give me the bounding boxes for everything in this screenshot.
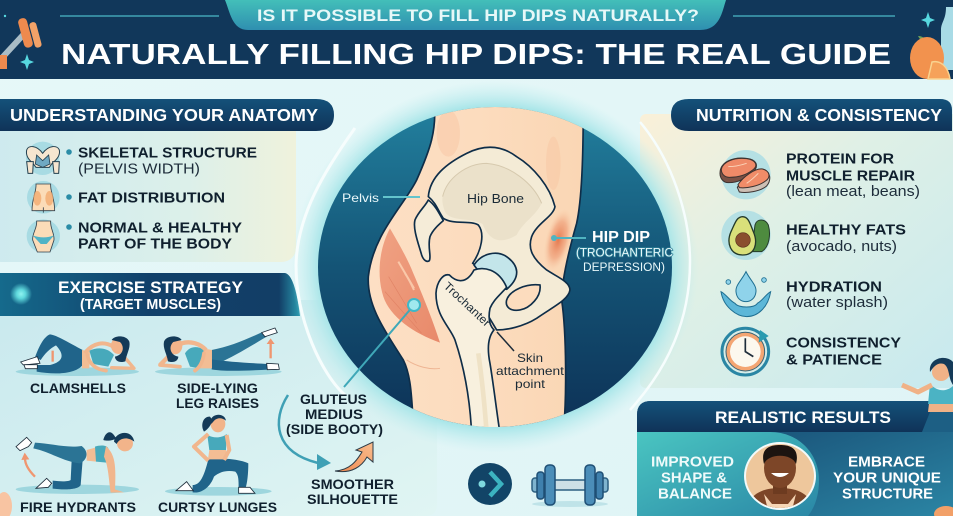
heading: exercise strategy: EXERCISE STRATEGY xyxy=(58,279,243,297)
text: improved shape and balance xyxy=(651,454,734,502)
heading: realistic results: REALISTIC RESULTS xyxy=(715,408,891,427)
text: fat distribution: FAT DISTRIBUTION xyxy=(78,190,225,206)
text: hydration: (water splash) xyxy=(786,295,888,311)
figure: fire hydrant pose xyxy=(16,432,139,494)
text: normal and healthy xyxy=(66,220,242,252)
leader: skin attachment xyxy=(497,332,514,351)
heading: understanding your anatomy: UNDERSTANDING YOUR ANATOMY xyxy=(10,105,318,125)
leader: gluteus medius xyxy=(344,299,420,387)
text: hydration xyxy=(786,278,888,311)
leader: hip dip xyxy=(551,235,586,241)
text: healthy fats: (avocado, nuts) xyxy=(786,239,897,255)
heading: nutrition and consistency xyxy=(671,99,952,131)
icon: water bottle xyxy=(941,7,953,70)
icon: fat distribution xyxy=(27,181,60,214)
icon: pelvis xyxy=(26,142,60,175)
icon: clock xyxy=(722,328,769,375)
text: consistency: & PATIENCE xyxy=(786,352,882,368)
panel: nutrition and consistency xyxy=(640,99,953,388)
label: skin attachment point: Skin xyxy=(517,351,543,365)
label: trochanter: Trochanter xyxy=(441,280,492,330)
central hip anatomy diagram xyxy=(291,81,699,453)
text: consistency xyxy=(786,334,901,368)
label: hip bone: Hip Bone xyxy=(467,191,524,206)
text: consistency: CONSISTENCY xyxy=(786,334,901,352)
main title: NATURALLY FILLING HIP DIPS: THE REAL GUIDE xyxy=(61,39,891,71)
text: improved shape and balance: SHAPE & xyxy=(661,470,727,486)
arrow: orange rising xyxy=(335,442,373,472)
label: hip dip: HIP DIP xyxy=(592,229,650,246)
label: side-lying leg raises: SIDE-LYING xyxy=(177,380,258,396)
icon: small star xyxy=(4,15,6,17)
obturator foramen xyxy=(506,285,540,310)
body silhouette and bones xyxy=(368,100,583,433)
text: protein xyxy=(786,150,920,200)
text: normal and healthy: NORMAL & HEALTHY xyxy=(78,220,242,236)
label: gluteus medius: (SIDE BOOTY) xyxy=(286,421,383,437)
label: gluteus medius: MEDIUS xyxy=(305,406,363,422)
icon: peach and orange xyxy=(910,36,950,79)
text: protein: PROTEIN FOR xyxy=(786,150,894,168)
text: embrace your unique structure: STRUCTURE xyxy=(842,486,933,502)
heading: understanding your anatomy xyxy=(0,99,334,131)
label: fire hydrants: FIRE HYDRANTS xyxy=(20,499,136,515)
icon: sparkle right xyxy=(921,12,935,28)
panel: realistic results xyxy=(637,401,953,516)
label: curtsy lunges: CURTSY LUNGES xyxy=(158,499,277,515)
figure: curtsy lunge pose xyxy=(165,415,272,496)
panel: exercise strategy xyxy=(0,273,437,516)
text: embrace your unique structure: YOUR UNIQUE xyxy=(833,470,941,486)
portrait: smiling woman xyxy=(744,442,816,510)
icon: protein steaks xyxy=(720,150,771,199)
header band xyxy=(0,0,953,79)
label: gluteus medius: GLUTEUS xyxy=(300,391,367,407)
text: skeletal structure xyxy=(66,144,257,178)
text: embrace your unique structure: EMBRACE xyxy=(848,454,925,470)
gluteus muscle xyxy=(380,228,440,343)
heading: realistic results xyxy=(637,401,953,432)
label: pelvis: Pelvis xyxy=(342,191,379,205)
icon: chevron button xyxy=(468,463,512,505)
icon: water drop xyxy=(721,272,771,317)
heading: exercise strategy xyxy=(0,273,300,316)
decorative rule left xyxy=(60,15,219,17)
label: skin attachment point xyxy=(496,351,565,391)
arrow: teal curve xyxy=(279,395,331,470)
label: skin attachment point: point xyxy=(515,377,546,391)
label: smoother silhouette xyxy=(307,476,398,507)
icon: normal healthy body xyxy=(27,219,60,253)
label: smoother silhouette: SMOOTHER xyxy=(311,476,394,492)
figure: clamshell pose xyxy=(16,334,139,376)
skin xyxy=(368,100,583,433)
label: clamshells: CLAMSHELLS xyxy=(30,380,126,396)
label: skin attachment point: attachment xyxy=(496,364,565,378)
icon: dumbbell xyxy=(532,465,608,507)
icon: sparkle left xyxy=(20,54,34,70)
icon: corner glow bottom left xyxy=(0,492,12,516)
label: hip dip xyxy=(576,229,673,274)
leader: pelvis xyxy=(383,196,420,198)
subtitle pill xyxy=(225,0,726,30)
exercise: fire hydrants xyxy=(16,432,139,515)
text: embrace your unique structure xyxy=(833,454,941,502)
label: smoother silhouette: SILHOUETTE xyxy=(307,491,398,507)
icon: avocado xyxy=(721,211,771,260)
femur xyxy=(436,269,507,433)
text: skeletal structure: (PELVIS WIDTH) xyxy=(78,160,200,178)
exercise: clamshells xyxy=(16,334,139,396)
panel: understanding your anatomy xyxy=(0,99,334,262)
exercise: curtsy lunges xyxy=(158,415,277,515)
text: normal and healthy: PART OF THE BODY xyxy=(78,236,232,252)
label: hip dip: (TROCHANTERIC xyxy=(576,248,673,260)
text: improved shape and balance: IMPROVED xyxy=(651,454,734,470)
subtitle pill: IS IT POSSIBLE TO FILL HIP DIPS NATURALLY? xyxy=(257,6,699,25)
label: side-lying leg raises xyxy=(176,380,259,411)
decorative rule right xyxy=(733,15,895,17)
figure: leg raise pose xyxy=(155,328,282,376)
teal result block xyxy=(637,432,819,516)
icon: corner fruit bottom right xyxy=(934,506,953,516)
text: protein: (lean meat, beans) xyxy=(786,184,920,200)
text: healthy fats: HEALTHY FATS xyxy=(786,222,906,238)
label: side-lying leg raises: LEG RAISES xyxy=(176,395,259,411)
text: protein: MUSCLE REPAIR xyxy=(786,168,915,184)
femoral head xyxy=(474,253,517,289)
icon: dumbbell left xyxy=(0,17,42,69)
heading: exercise strategy: (TARGET MUSCLES) xyxy=(80,297,221,313)
label: hip dip: DEPRESSION) xyxy=(583,262,665,274)
text: improved shape and balance: BALANCE xyxy=(658,486,732,502)
exercise: side-lying leg raises xyxy=(155,328,282,411)
pelvis bone xyxy=(428,147,570,330)
text: skeletal structure: SKELETAL STRUCTURE xyxy=(78,144,257,162)
label: gluteus medius xyxy=(286,391,383,437)
heading: nutrition and consistency: NUTRITION & CONSISTENCY xyxy=(696,105,942,125)
text: hydration: HYDRATION xyxy=(786,278,882,296)
text: healthy fats xyxy=(786,222,906,255)
illustration: woman at results panel xyxy=(902,358,953,432)
